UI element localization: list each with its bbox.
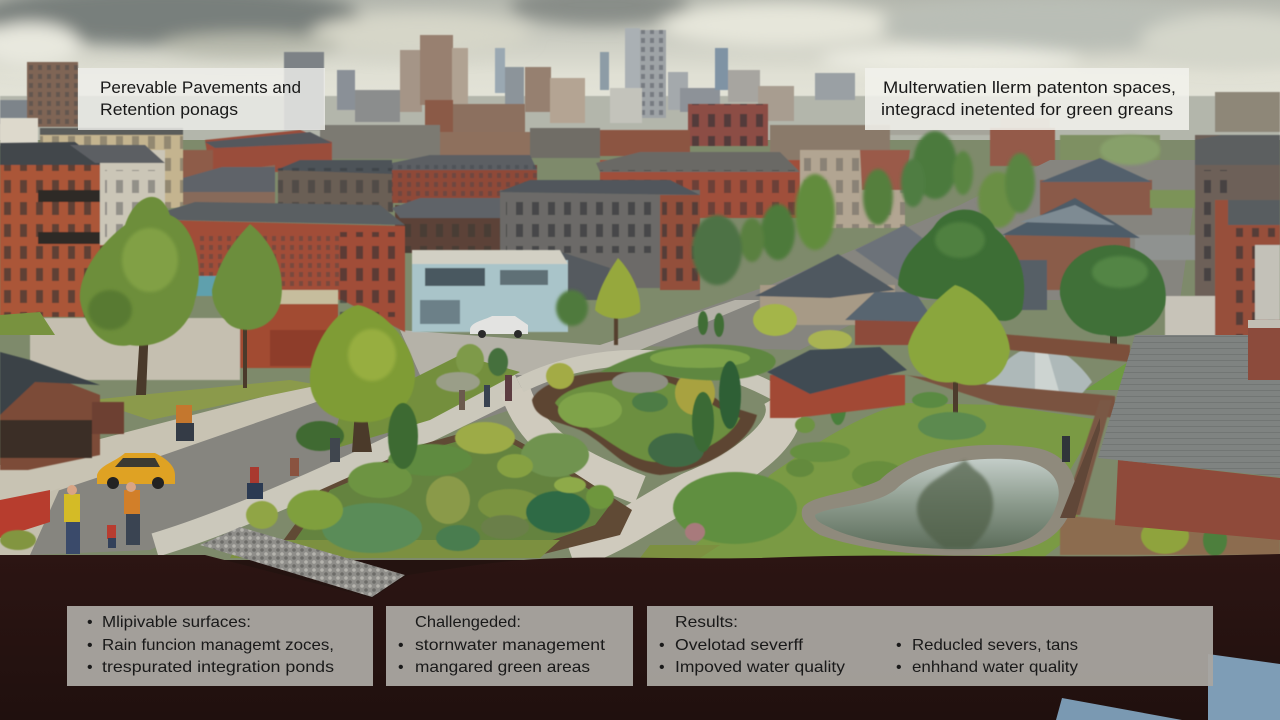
sky with clouds — [0, 0, 1280, 150]
top-left label — [78, 68, 325, 130]
panel: challenges: Challengeded: — [415, 614, 521, 631]
yellow green tree — [595, 258, 640, 345]
retention pond — [802, 445, 1076, 556]
panel: results: • — [659, 637, 665, 654]
yellow-green tree on lawn — [908, 285, 1010, 418]
panel: surfaces: Mlipivable surfaces: — [102, 614, 251, 631]
upper garden bed — [296, 304, 852, 451]
conifer shrubs — [388, 311, 846, 469]
small tree by apartment — [212, 224, 282, 388]
panel: results: • — [896, 659, 902, 676]
red fence — [0, 490, 50, 538]
right side brick buildings — [1040, 135, 1280, 340]
small brick house with dark roof at the left — [0, 352, 124, 470]
top-right label: integracd inetented for green greans — [881, 101, 1173, 119]
foreground tree left — [80, 197, 199, 395]
top-right label — [865, 68, 1189, 130]
underground soil band — [0, 554, 1280, 720]
yellow car — [97, 453, 175, 489]
panel: results: • — [896, 637, 902, 654]
large brick building with grey roof — [1060, 320, 1280, 540]
suburban houses on the right — [755, 198, 1140, 345]
panel: surfaces: Rain funcion managemt zoces, — [102, 637, 334, 654]
white car — [470, 316, 528, 338]
central garden bed — [532, 363, 757, 475]
panel: results: Impoved water quality — [675, 659, 845, 676]
main road and sidewalk surfaces — [0, 160, 1200, 560]
panel: challenges: stornwater management — [415, 637, 606, 654]
panel: results: enhhand water quality — [912, 659, 1078, 676]
distant city skyline — [0, 28, 1280, 146]
top-left label: Retention ponags — [100, 101, 238, 119]
gabion rock basket — [200, 527, 405, 597]
panel: challenges: mangared green areas — [415, 659, 590, 676]
people walking and workers — [64, 375, 1070, 554]
tall trees in the background — [556, 131, 1160, 326]
bottom-right blue paving slabs — [1056, 654, 1280, 720]
midground green haze and ground base — [0, 140, 1280, 560]
top-right label: Multerwatien llerm patenton spaces, — [883, 79, 1176, 97]
panel: surfaces: • — [87, 659, 93, 676]
panel: surfaces: • — [87, 614, 93, 631]
grey stone apartment — [498, 180, 700, 300]
left brick apartment building — [0, 142, 165, 317]
oak tree far right — [1060, 245, 1166, 347]
lawn with path beds — [0, 312, 1128, 560]
large oak tree right — [898, 210, 1024, 330]
panel: results: Reducled severs, tans — [912, 637, 1078, 654]
bright street tree — [310, 305, 415, 452]
panel: results — [647, 606, 1213, 686]
lawn shrubs — [673, 392, 1227, 556]
lower planted rain garden — [0, 422, 614, 553]
wooden fences — [905, 333, 1280, 555]
panel: surfaces: • — [87, 637, 93, 654]
panel: results: Results: — [675, 614, 738, 631]
white tent shelter — [984, 343, 1092, 396]
top-left label: Perevable Pavements and — [100, 79, 301, 97]
panel: results: • — [659, 659, 665, 676]
panel: results: Ovelotad severff — [675, 637, 804, 654]
brick pavilion with dark roof — [767, 347, 907, 418]
brick city blocks in the background — [0, 100, 1160, 253]
panel: challenges: • — [398, 637, 404, 654]
panel: surfaces: trespurated integration ponds — [102, 659, 334, 676]
panel: challenges — [386, 606, 633, 686]
light blue building — [412, 250, 568, 332]
central brick apartment with grey roof — [30, 202, 405, 380]
panel: challenges: • — [398, 659, 404, 676]
panel: surfaces — [67, 606, 373, 686]
